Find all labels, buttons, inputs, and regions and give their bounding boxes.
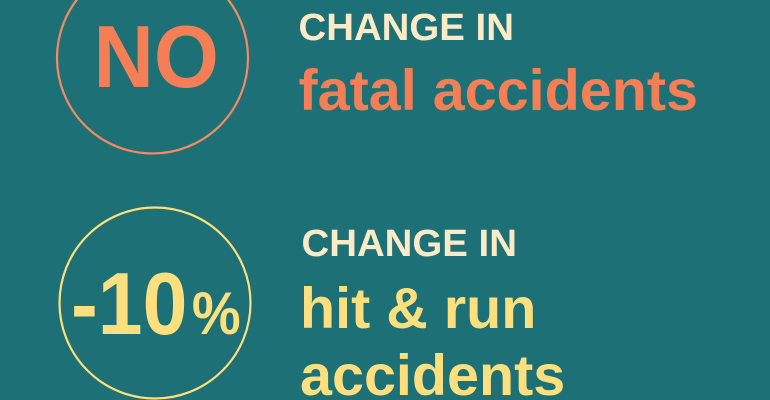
heading: change in (fatal): CHANGE IN [298,6,514,49]
icon: orange circle with NO: NO [94,8,219,106]
label: hit and run accidents: hit & run [300,277,536,341]
icon: orange circle with NO [57,0,248,154]
heading: change in (hit and run): CHANGE IN [302,222,517,265]
icon: yellow circle with -10%: -10% [71,255,241,353]
panel: fatal accidents statistic [57,0,698,154]
icon: yellow circle with -10% [60,208,250,398]
label: fatal accidents: fatal accidents [298,59,698,123]
panel: hit and run accidents statistic [60,208,565,400]
